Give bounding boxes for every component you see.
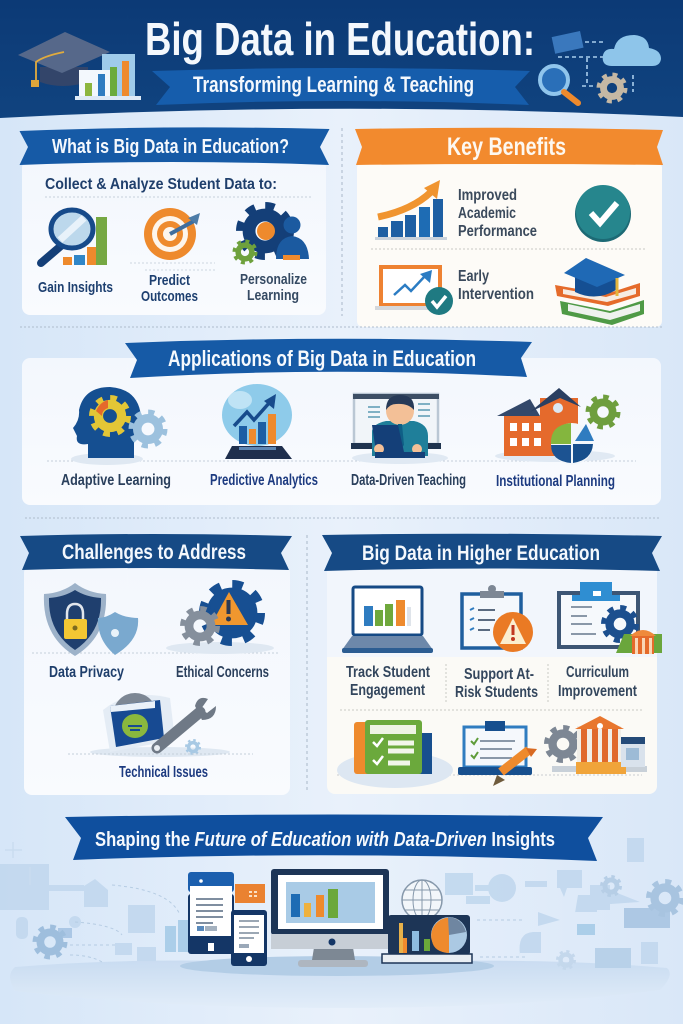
icon: clipboard and pen [458, 721, 537, 786]
icon: personalize gear and person [234, 207, 309, 262]
icon: phone [231, 910, 267, 966]
icon: curriculum monitor [559, 582, 662, 654]
labels: higher education row one: Engagement [350, 682, 426, 699]
labels: higher education row one [346, 664, 638, 701]
icon: crystal globe chart [222, 384, 292, 459]
labels: applications: Data-Driven Teaching [351, 472, 466, 489]
heading ribbon: challenges: Challenges to Address [62, 541, 246, 564]
text: improved academic performance: Academic [458, 205, 516, 222]
text: early intervention: Intervention [458, 286, 534, 303]
label: gain insights: Gain Insights [38, 279, 113, 296]
heading ribbon: what is big data: What is Big Data in Education? [52, 136, 289, 158]
heading ribbon: challenges [20, 534, 292, 570]
section: Key Benefits [355, 128, 663, 327]
heading ribbon: key benefits [355, 128, 663, 165]
heading ribbon: key benefits: Key Benefits [447, 133, 566, 161]
labels: higher education row one: Curriculum [566, 664, 629, 681]
icon: rising bars [375, 180, 447, 240]
text: improved academic performance [458, 187, 537, 240]
icon: orange card [235, 884, 265, 903]
intro text: Collect & Analyze Student Data to: [45, 176, 277, 193]
labels: privacy and ethical: Data Privacy [49, 664, 124, 681]
section: Applications [22, 339, 661, 505]
label: predict outcomes: Predict [149, 272, 190, 289]
label: predict outcomes [141, 272, 198, 305]
text: early intervention [458, 268, 534, 303]
footer background pale icons [0, 838, 681, 1008]
text: improved academic performance: Improved [458, 187, 517, 204]
label: personalize learning [240, 271, 307, 304]
label: predict outcomes: Outcomes [141, 288, 198, 305]
header band [0, 0, 683, 118]
labels: applications: Predictive Analytics [210, 472, 318, 489]
icon: desktop monitor chart [271, 869, 389, 967]
labels: higher education row one: Track Student [346, 664, 431, 681]
icon: laptop with charts [382, 915, 472, 963]
section: Higher Education [322, 534, 662, 794]
subtitle ribbon: Transforming Learning & Teaching [193, 72, 474, 97]
icon: graduation cap with chart [18, 32, 141, 100]
labels: higher education row one: Support At- [464, 666, 534, 683]
icon: head with gears [71, 387, 164, 465]
section: Challenges [20, 534, 292, 795]
labels: privacy and ethical: Ethical Concerns [176, 664, 269, 681]
devices illustration [180, 869, 494, 976]
section: What is Big Data [20, 127, 330, 315]
panel: key benefits [357, 162, 662, 327]
text: improved academic performance: Performance [458, 223, 537, 240]
heading ribbon: higher education: Big Data in Higher Education [362, 542, 600, 565]
heading ribbon: applications: Applications of Big Data in Education [168, 346, 476, 371]
icon: clipboard alert [462, 585, 533, 652]
icon: books and cap [555, 258, 644, 325]
subtitle ribbon [152, 68, 530, 105]
icon: monitor with check [375, 267, 453, 315]
icon: laptop chart [342, 587, 433, 653]
icon: gain insights magnifier [41, 210, 107, 265]
icon: school and pie chart [495, 388, 618, 465]
label: technical issues: Technical Issues [119, 764, 208, 781]
icon: university with gear [547, 716, 647, 774]
icon: technical issues wrench [90, 693, 230, 757]
footer ribbon [65, 814, 603, 861]
labels: higher education row one: Improvement [558, 683, 638, 700]
title: Big Data in Education: [145, 13, 535, 65]
icon: data cloud, magnifier and gear [540, 31, 661, 103]
label: personalize learning: Learning [247, 287, 299, 304]
icon: target [130, 208, 215, 270]
panel: challenges [24, 565, 290, 795]
labels: applications: Adaptive Learning [61, 472, 171, 489]
label: personalize learning: Personalize [240, 271, 307, 288]
icon: green checklist folder [337, 720, 453, 788]
heading ribbon: higher education [322, 534, 662, 571]
icon: check badge [575, 185, 631, 242]
labels: applications [61, 472, 615, 490]
labels: higher education row one: Risk Students [455, 684, 538, 701]
icon: tablet [188, 872, 234, 954]
panel: higher education [327, 565, 657, 794]
heading ribbon: what is big data [20, 127, 330, 165]
icon: teacher at board [351, 394, 448, 464]
heading ribbon: applications [125, 339, 532, 378]
text: early intervention: Early [458, 268, 489, 285]
divider dashes [341, 128, 343, 316]
labels: privacy and ethical [49, 664, 269, 681]
icon: warning gear [166, 585, 274, 654]
labels: applications: Institutional Planning [496, 473, 615, 490]
icon: security shield [44, 583, 138, 656]
icon: globe [402, 880, 442, 920]
footer ribbon: Shaping the Future of Education with Data-Driven Insights [95, 829, 555, 851]
panel: what is big data [22, 160, 326, 315]
panel: applications [22, 358, 661, 505]
